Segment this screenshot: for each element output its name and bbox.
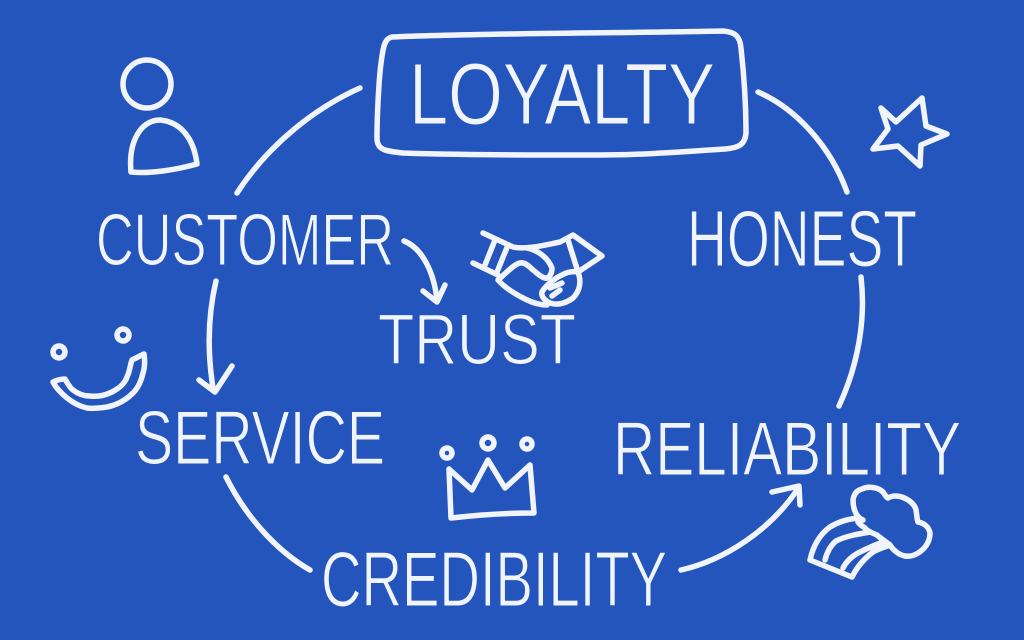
label: credibility: CREDIBILITY xyxy=(321,535,667,623)
title frame xyxy=(377,31,746,155)
band stripes xyxy=(825,532,883,568)
arrow: customer to service xyxy=(199,281,232,392)
arrow: service to credibility arc xyxy=(226,477,310,570)
title text: LOYALTY xyxy=(409,46,715,143)
icon: handshake xyxy=(473,233,602,305)
icon: smile xyxy=(53,329,145,408)
label: trust: TRUST xyxy=(378,301,576,380)
label: honest: HONEST xyxy=(687,194,917,283)
left cuff xyxy=(473,240,508,275)
arrow: loyalty to customer arc xyxy=(237,88,360,193)
right eye xyxy=(117,329,129,341)
icon: person xyxy=(123,60,197,173)
crown jewels xyxy=(442,448,452,458)
arrow: honest to reliability arc xyxy=(839,277,862,406)
top edge and right cuff xyxy=(483,233,602,272)
person head xyxy=(123,60,171,108)
crown body xyxy=(449,460,534,518)
icon: chef hat xyxy=(810,487,930,577)
icon: star xyxy=(873,98,947,166)
arrow: loyalty to honest arc xyxy=(758,92,847,192)
arrow: customer to trust xyxy=(404,241,445,302)
icon: crown xyxy=(442,437,534,518)
smiling mouth xyxy=(53,354,145,408)
hat puff xyxy=(853,487,930,556)
hat band xyxy=(810,518,890,577)
person body xyxy=(131,120,197,173)
label: customer: CUSTOMER xyxy=(96,200,394,281)
arrow: credibility to reliability xyxy=(681,486,800,570)
fist and fingers xyxy=(542,272,580,304)
title box: loyalty xyxy=(377,31,746,155)
upper hand and lower hand xyxy=(498,248,552,305)
label: service: SERVICE xyxy=(135,396,385,481)
left eye xyxy=(53,346,65,358)
